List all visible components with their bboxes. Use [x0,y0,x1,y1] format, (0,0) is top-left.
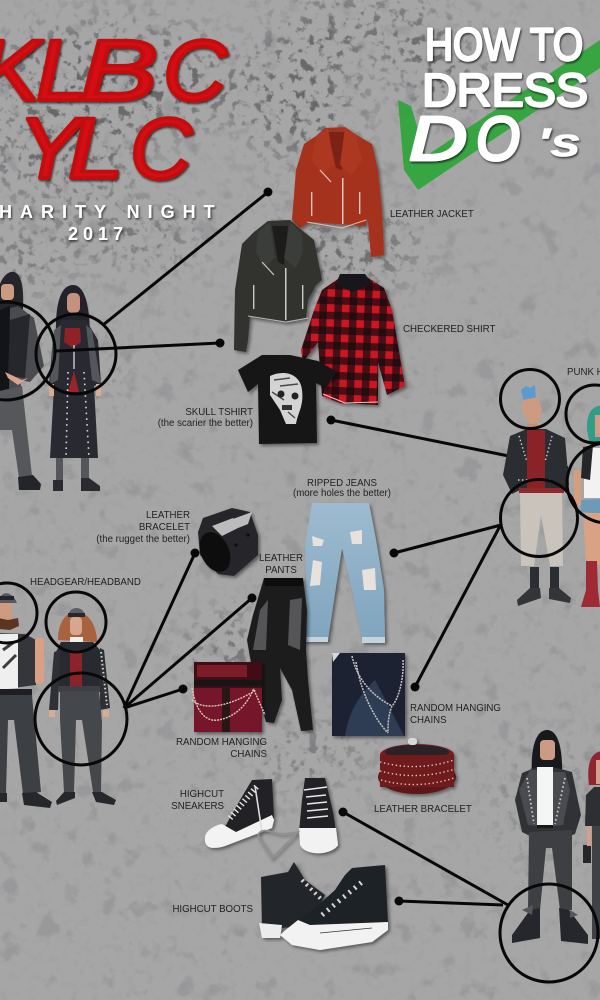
labels: HIGHCUT BOOTS [172,904,254,915]
item: leather pants [247,578,313,731]
labels: (more holes the better) [293,488,391,499]
labels: RIPPED JEANS [307,478,378,489]
title: KLBC YLC: L [68,101,124,197]
labels: PANTS [265,565,297,576]
figure: blue mohawk punk man [503,385,571,606]
heading: how to dress do's: O [476,105,520,174]
title: KLBC YLC: C [130,101,193,197]
labels: (the rugget the better) [96,534,190,545]
labels: LEATHER [146,510,190,521]
heading: how to dress do's: 's [537,121,581,165]
labels: RANDOM HANGING [176,737,267,748]
item: checkered shirt [301,274,405,405]
labels: LEATHER JACKET [390,209,474,220]
figure: gothic woman in long coat [49,285,101,491]
labels: HEADGEAR/HEADBAND [30,577,141,588]
title: KLBC YLC: L [36,23,88,119]
labels: LEATHER BRACELET [374,804,472,815]
icon: green check mark [398,40,600,190]
labels: BRACELET [139,522,190,533]
item: skull t-shirt [238,355,337,444]
labels: RANDOM HANGING [410,703,501,714]
title: KLBC YLC: B [80,23,158,119]
item: red leather jacket [292,127,384,257]
title: KLBC YLC [0,23,228,197]
labels: SKULL TSHIRT [185,407,253,418]
connector lines and dots [56,188,568,906]
figure: biker woman with headgear [49,608,116,805]
item: red studded wrap bracelet [378,738,456,794]
heading: how to dress do's: D [409,105,467,174]
labels: CHAINS [230,749,268,760]
item: ripped jeans [302,503,385,643]
figure: biker man with headgear [0,593,52,808]
labels [30,209,600,915]
item: jeans with wallet chains [332,653,405,736]
highlight circles [0,302,600,982]
heading: how to dress do's [409,19,588,174]
figure: green hair punk woman [574,406,600,607]
subtitle: charity night 2017: 2017 [68,224,128,244]
labels: CHAINS [410,715,447,726]
figure: long-haired man, left [0,272,44,490]
item: black leather jacket [234,220,322,352]
labels: LEATHER [259,553,303,564]
item: red tartan bottoms with chains [192,662,265,732]
heading: how to dress do's: DRESS [422,64,588,116]
labels: CHECKERED SHIRT [403,324,495,335]
item: black leather bracelet [193,508,258,577]
title: KLBC YLC: C [163,23,228,119]
item: highcut boots [259,862,388,950]
subtitle: charity night 2017 [0,202,223,244]
figure: red-haired woman, bottom right [583,751,600,939]
labels: SNEAKERS [171,801,225,812]
labels: HIGHCUT [180,789,224,800]
title: KLBC YLC: Y [18,101,86,197]
labels: (the scarier the better) [158,418,253,429]
figure: long-haired man in boots [512,730,588,944]
item: highcut sneakers [205,778,338,858]
